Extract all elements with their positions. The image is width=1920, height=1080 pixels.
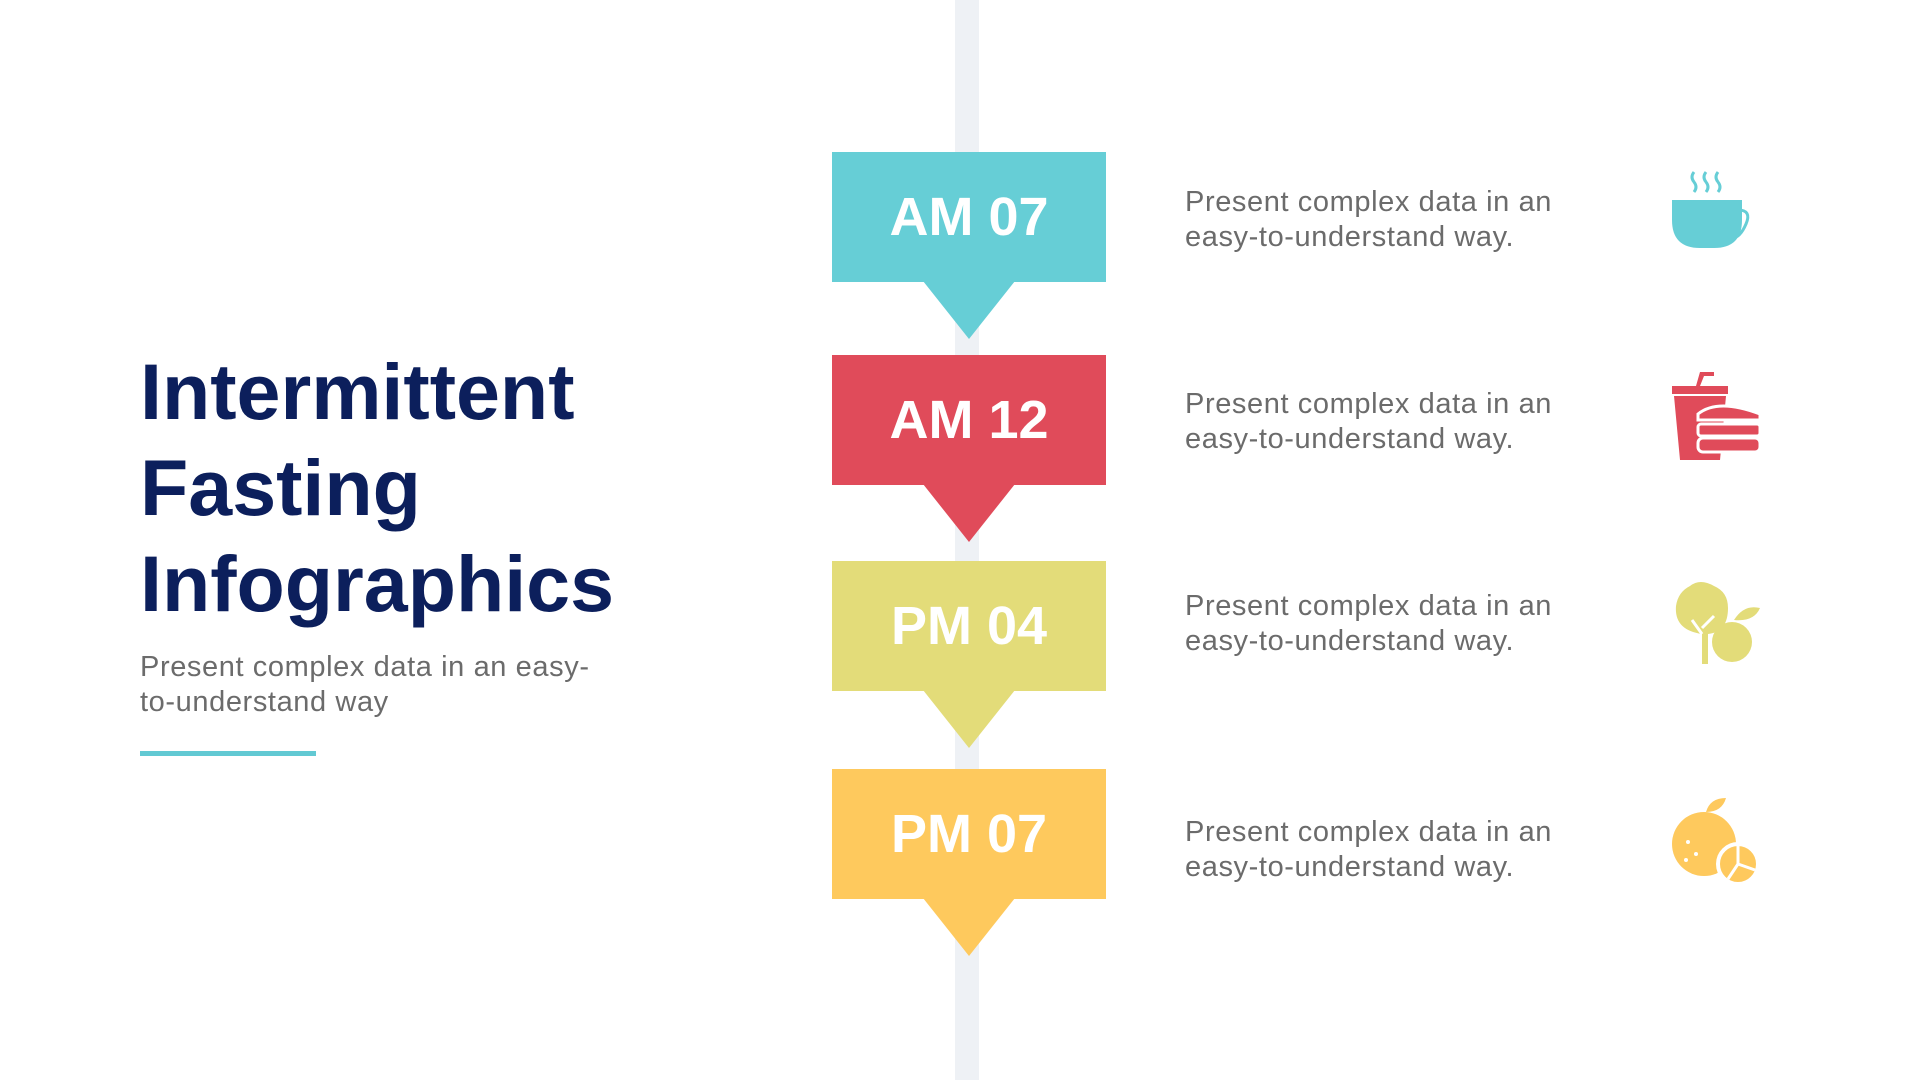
step PM 07 xyxy=(832,769,1106,899)
step PM 04: PM 04 xyxy=(891,596,1047,656)
subtitle xyxy=(140,651,590,718)
step AM 12 xyxy=(832,355,1106,485)
icon: orange xyxy=(1672,798,1756,882)
text 1 xyxy=(1185,186,1552,253)
title: Infographics xyxy=(140,539,614,628)
text 2 xyxy=(1185,388,1552,455)
text 4: easy-to-understand way. xyxy=(1185,851,1514,883)
icon: coffee cup xyxy=(1672,171,1750,248)
text 3: Present complex data in an xyxy=(1185,590,1552,622)
step AM 07 xyxy=(832,152,1106,282)
step AM 12: AM 12 xyxy=(889,390,1049,450)
text 1: Present complex data in an xyxy=(1185,186,1552,218)
title: Intermittent xyxy=(140,347,574,436)
step PM 07: PM 07 xyxy=(891,804,1047,864)
timeline line xyxy=(955,0,979,1080)
title: Fasting xyxy=(140,443,421,532)
text 3 xyxy=(1185,590,1552,657)
text 2: Present complex data in an xyxy=(1185,388,1552,420)
step PM 04 xyxy=(832,561,1106,691)
subtitle: Present complex data in an easy- xyxy=(140,651,590,683)
text 4: Present complex data in an xyxy=(1185,816,1552,848)
icon: fast food xyxy=(1672,372,1758,460)
accent underline xyxy=(140,751,316,756)
step AM 07: AM 07 xyxy=(889,187,1049,247)
text 1: easy-to-understand way. xyxy=(1185,221,1514,253)
text 2: easy-to-understand way. xyxy=(1185,423,1514,455)
icon: vegetables and apple xyxy=(1676,582,1760,664)
text 3: easy-to-understand way. xyxy=(1185,625,1514,657)
title xyxy=(140,347,614,628)
subtitle: to-understand way xyxy=(140,686,389,718)
text 4 xyxy=(1185,816,1552,883)
